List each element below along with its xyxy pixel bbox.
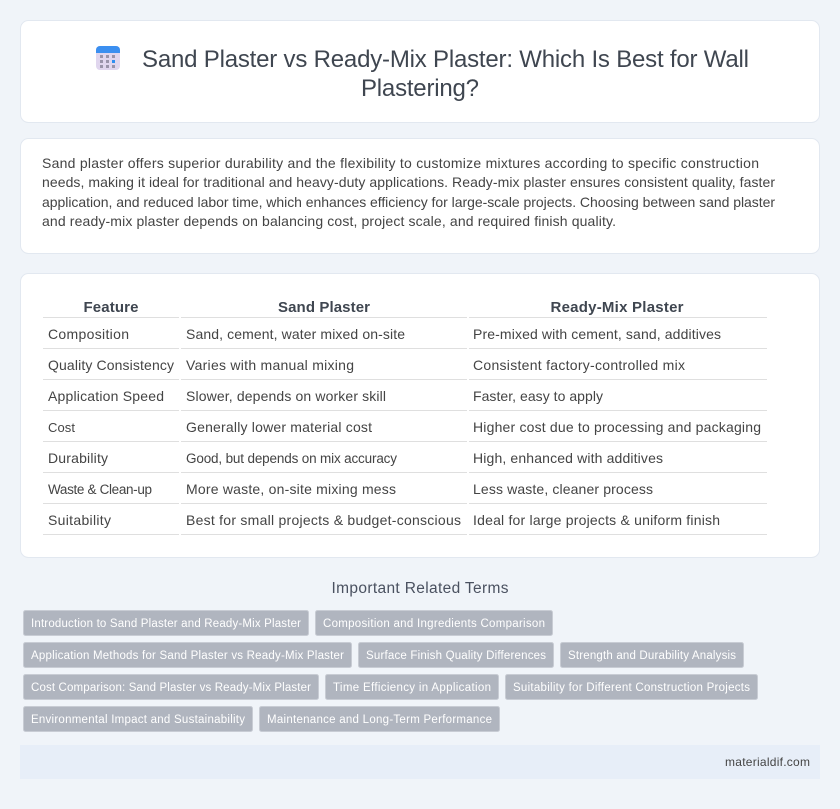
icon: calendar bbox=[96, 46, 120, 70]
intro text: application, and reduced labor time, which enhances efficiency for large-scale projects. Choosing between sand plaster bbox=[42, 194, 775, 210]
related term tags: Maintenance and Long-Term Performance bbox=[267, 714, 492, 726]
related terms heading: Important Related Terms bbox=[332, 580, 509, 597]
table rows: Good, but depends on mix accuracy bbox=[186, 451, 397, 466]
table rows: Composition bbox=[48, 326, 129, 342]
related term tags: Cost Comparison: Sand Plaster vs Ready-Mix Plaster bbox=[31, 682, 311, 694]
table rows: Pre-mixed with cement, sand, additives bbox=[473, 326, 721, 342]
table rows: Sand, cement, water mixed on-site bbox=[186, 326, 405, 342]
related term tags: Environmental Impact and Sustainability bbox=[31, 714, 245, 726]
table header: Feature bbox=[84, 299, 138, 316]
header panel bbox=[20, 20, 820, 122]
intro text: Sand plaster offers superior durability and the flexibility to customize mixtures according to specific construction bbox=[42, 155, 759, 171]
table rows: Higher cost due to processing and packaging bbox=[473, 419, 761, 435]
table header: Sand Plaster bbox=[278, 299, 370, 316]
title: Plastering? bbox=[361, 75, 479, 102]
table rows: Faster, easy to apply bbox=[473, 388, 603, 404]
title bbox=[142, 46, 749, 102]
table rows: Generally lower material cost bbox=[186, 419, 372, 435]
comparison table panel bbox=[20, 274, 820, 558]
table rows: Waste & Clean-up bbox=[48, 482, 152, 497]
intro text bbox=[42, 155, 775, 229]
table rows: Cost bbox=[48, 420, 75, 435]
table rows: Application Speed bbox=[48, 388, 164, 404]
related term tags bbox=[24, 610, 758, 732]
table rows: Durability bbox=[48, 450, 108, 466]
related term tags: Application Methods for Sand Plaster vs Ready-Mix Plaster bbox=[31, 650, 344, 662]
table rows: Consistent factory-controlled mix bbox=[473, 357, 685, 373]
intro panel bbox=[20, 138, 820, 254]
related term tags: Strength and Durability Analysis bbox=[568, 650, 736, 662]
table rows: More waste, on-site mixing mess bbox=[186, 481, 396, 497]
intro text: needs, making it ideal for traditional and heavy-duty applications. Ready-mix plaster ensures consistent quality, faster bbox=[42, 174, 775, 190]
related term tags: Composition and Ingredients Comparison bbox=[323, 618, 545, 630]
table rows: Less waste, cleaner process bbox=[473, 481, 653, 497]
table rows: Suitability bbox=[48, 512, 111, 528]
related term tags: Surface Finish Quality Differences bbox=[366, 650, 546, 662]
footer source: materialdif.com bbox=[725, 755, 810, 769]
table rows: Ideal for large projects & uniform finish bbox=[473, 512, 720, 528]
footer bar bbox=[20, 745, 820, 779]
related term tags: Time Efficiency in Application bbox=[333, 682, 491, 694]
related term tags: Introduction to Sand Plaster and Ready-Mix Plaster bbox=[31, 618, 301, 630]
table rows: Best for small projects & budget-conscious bbox=[186, 512, 461, 528]
intro text: and ready-mix plaster depends on balancing cost, project scale, and required finish quality. bbox=[42, 213, 616, 229]
table header bbox=[84, 299, 684, 316]
table rows: Quality Consistency bbox=[48, 357, 174, 373]
table rows: High, enhanced with additives bbox=[473, 450, 663, 466]
table rows: Varies with manual mixing bbox=[186, 357, 354, 373]
related term tags: Suitability for Different Construction Projects bbox=[513, 682, 750, 694]
table rows: Slower, depends on worker skill bbox=[186, 388, 386, 404]
table header: Ready-Mix Plaster bbox=[550, 299, 684, 316]
table rows bbox=[48, 326, 761, 528]
title: Sand Plaster vs Ready-Mix Plaster: Which Is Best for Wall bbox=[142, 46, 749, 73]
